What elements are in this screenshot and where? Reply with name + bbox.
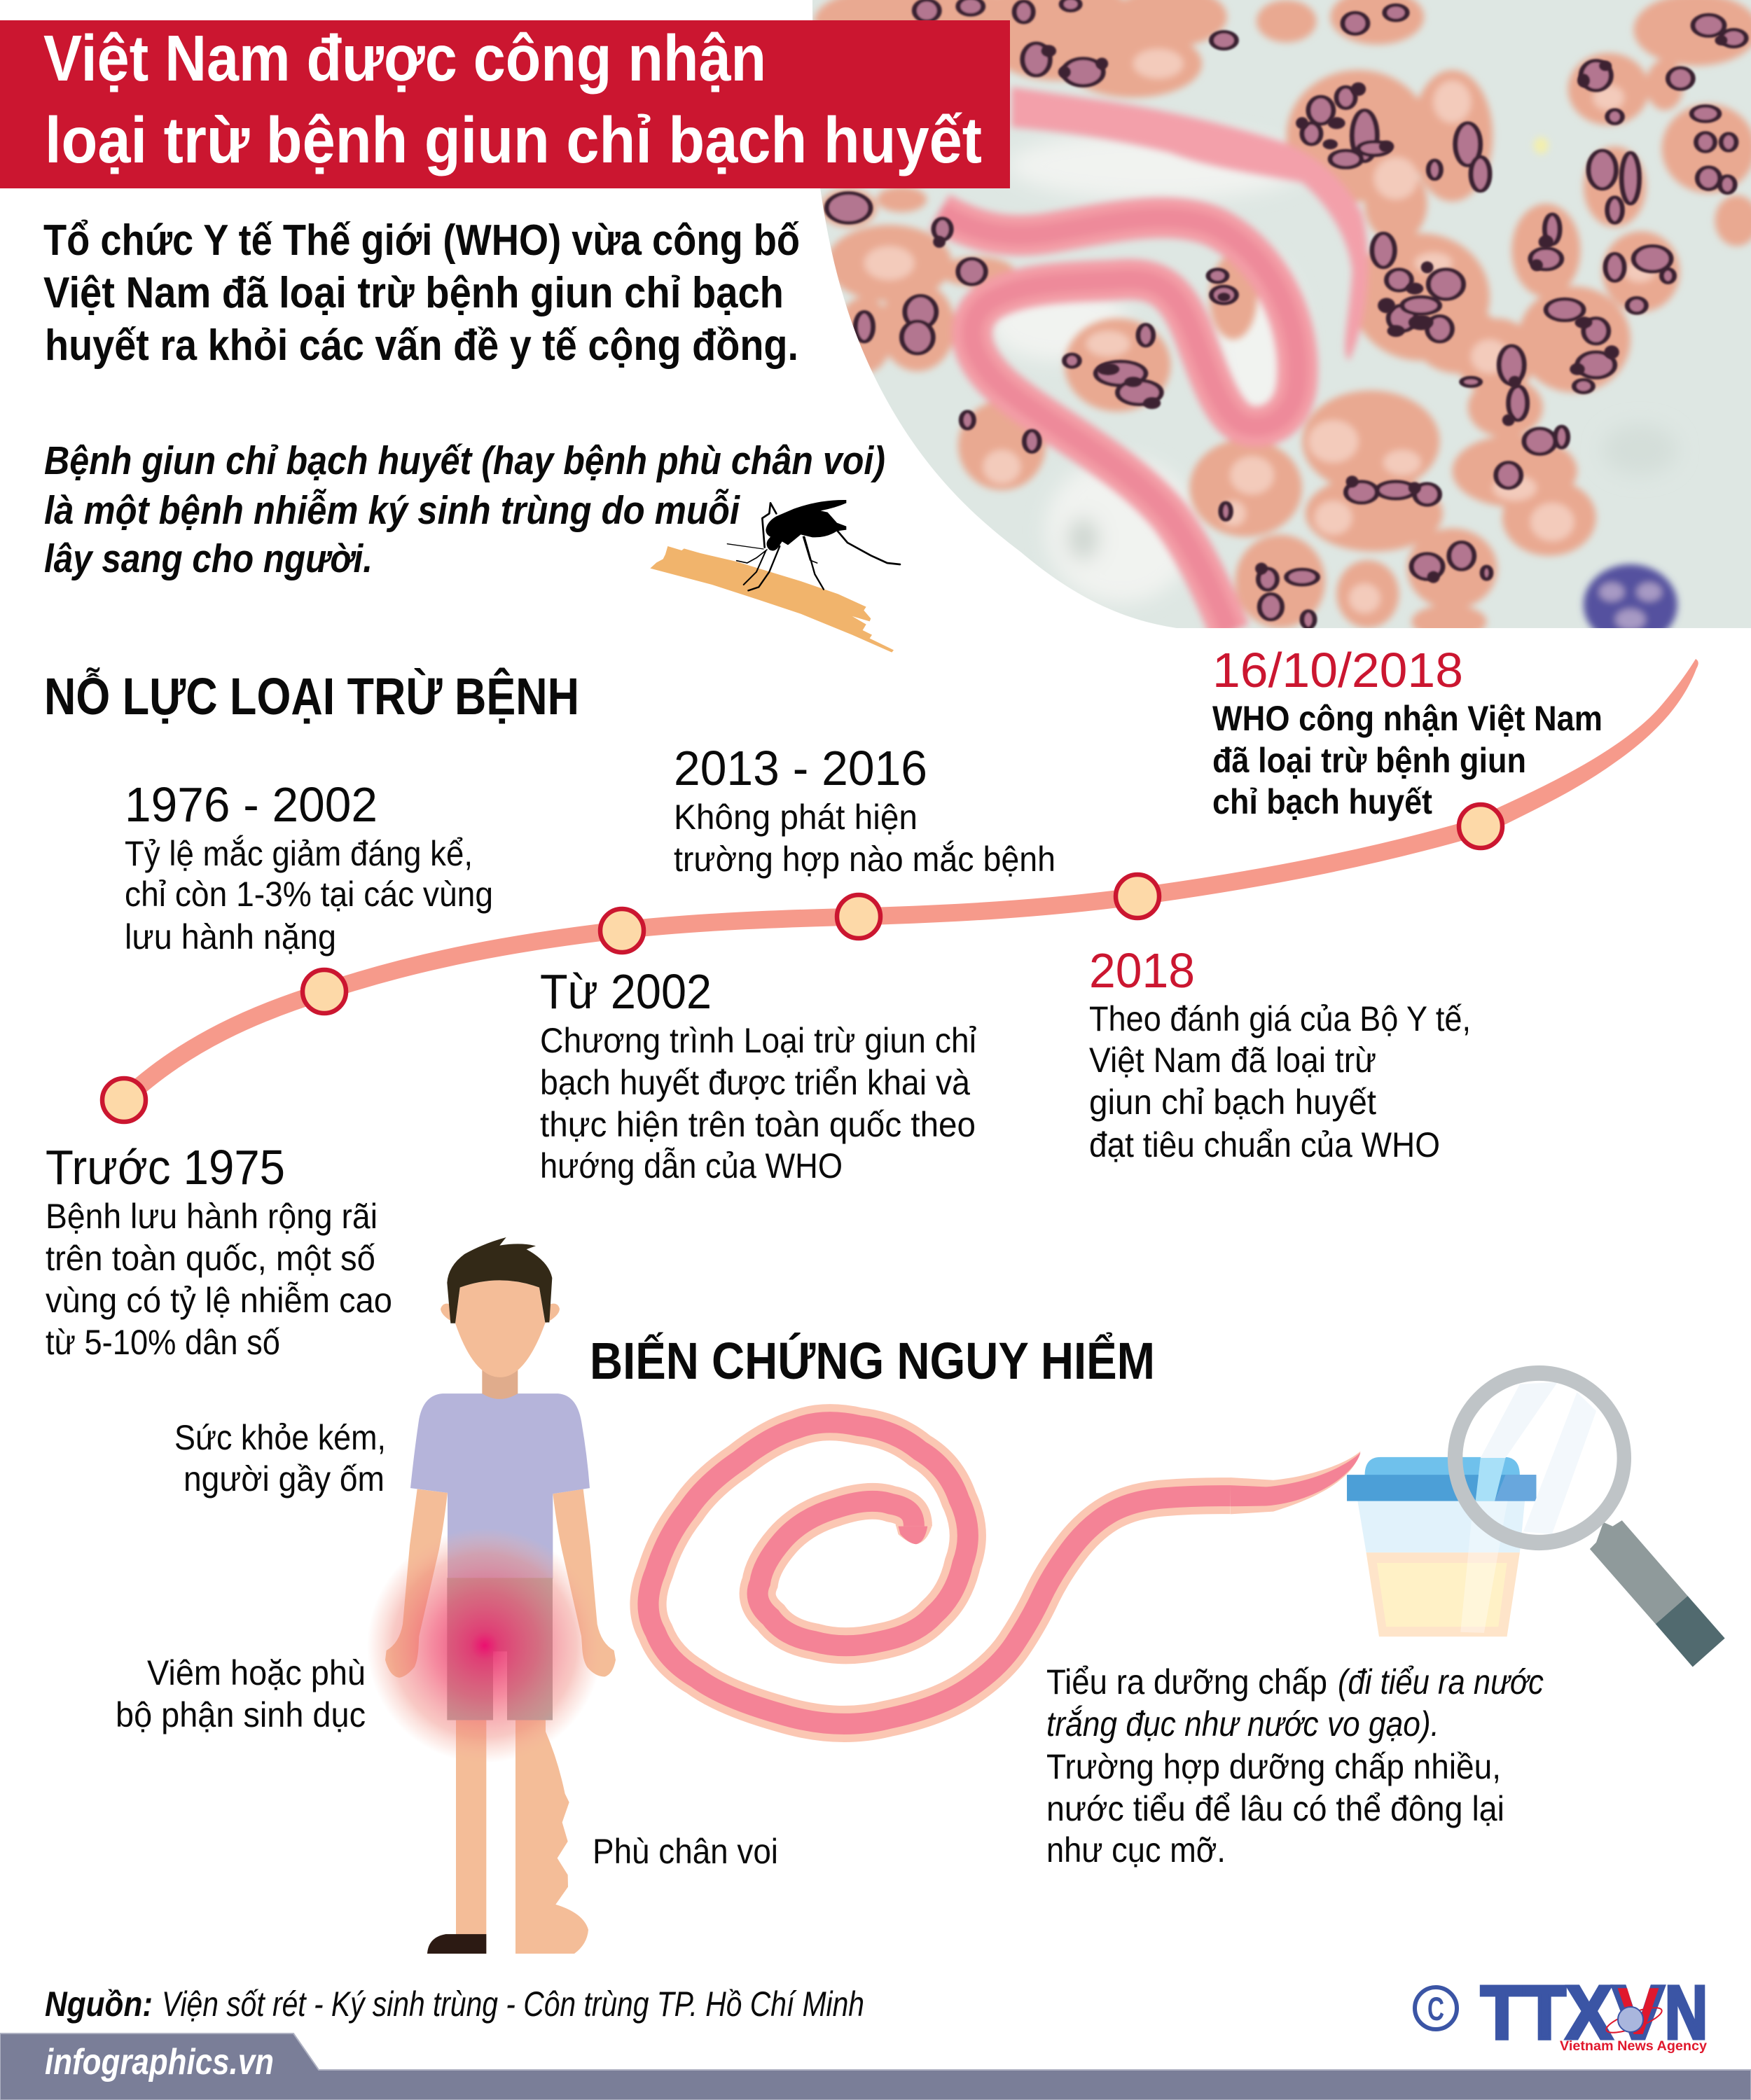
complication description text: (đi tiểu ra nước bbox=[1338, 1662, 1544, 1702]
complication description text: nước tiểu để lâu có thể đông lại bbox=[1046, 1789, 1504, 1828]
logo: copyright mark bbox=[1415, 1987, 1457, 2029]
timeline curve with markers bbox=[102, 659, 1698, 1122]
complication description text bbox=[1046, 1662, 1544, 1870]
complication description text: Tiểu ra dưỡng chấp bbox=[1046, 1662, 1327, 1702]
icon: coiled worm bbox=[649, 1422, 1360, 1724]
logo: TTXVN bbox=[1481, 1970, 1708, 2054]
timeline entry: from 2002: Chương trình Loại trừ giun chỉ bbox=[540, 1021, 976, 1060]
icon: specimen cup under magnifying glass bbox=[1347, 1365, 1725, 1667]
label: genital swelling: bộ phận sinh dục bbox=[116, 1695, 366, 1734]
timeline entry: 1976-2002: lưu hành nặng bbox=[125, 917, 336, 957]
timeline entry: from 2002: thực hiện trên toàn quốc theo bbox=[540, 1105, 976, 1144]
logo: copyright mark: C bbox=[1427, 1990, 1444, 2027]
heading: complications: BIẾN CHỨNG NGUY HIỂM bbox=[590, 1332, 1155, 1390]
timeline entry: from 2002: bạch huyết được triển khai và bbox=[540, 1063, 970, 1102]
timeline entry: from 2002 bbox=[540, 964, 976, 1185]
timeline entry: 1976-2002: 1976 - 2002 bbox=[125, 777, 378, 832]
timeline entry: before 1975: trên toàn quốc, một số bbox=[46, 1239, 375, 1278]
intro text: huyết ra khỏi các vấn đề y tế cộng đồng. bbox=[45, 321, 798, 370]
timeline entry: 1976-2002: chỉ còn 1-3% tại các vùng bbox=[125, 875, 493, 914]
logo: TTXVN: TTX bbox=[1481, 1970, 1612, 2054]
timeline entry: 1976-2002: Tỷ lệ mắc giảm đáng kể, bbox=[125, 834, 473, 873]
timeline entry: 2013-2016: Không phát hiện bbox=[674, 798, 918, 837]
timeline entry: 2018: Theo đánh giá của Bộ Y tế, bbox=[1089, 999, 1471, 1038]
definition text: lây sang cho người. bbox=[44, 536, 373, 581]
complication description text: Trường hợp dưỡng chấp nhiều, bbox=[1046, 1747, 1501, 1786]
timeline entry: from 2002: Từ 2002 bbox=[540, 964, 712, 1019]
heading: efforts: NỖ LỰC LOẠI TRỪ BỆNH bbox=[44, 667, 579, 725]
timeline entry: 2013-2016: trường hợp nào mắc bệnh bbox=[674, 840, 1056, 879]
intro text bbox=[43, 216, 800, 370]
timeline entry: 2018: 2018 bbox=[1089, 943, 1195, 998]
source line: Viện sốt rét - Ký sinh trùng - Côn trùng TP. Hồ Chí Minh bbox=[162, 1984, 864, 2024]
complication description text: trắng đục như nước vo gạo). bbox=[1046, 1704, 1439, 1744]
footer band: infographics.vn bbox=[45, 2042, 274, 2082]
title banner: Việt Nam được công nhận bbox=[43, 22, 766, 95]
timeline entry: before 1975: từ 5-10% dân số bbox=[46, 1323, 280, 1362]
complication description text: như cục mỡ. bbox=[1046, 1830, 1226, 1870]
timeline entry: 2018 bbox=[1089, 943, 1471, 1164]
label: poor health bbox=[174, 1418, 386, 1498]
label: poor health: Sức khỏe kém, bbox=[174, 1418, 386, 1457]
label: poor health: người gầy ốm bbox=[184, 1459, 385, 1498]
label: genital swelling: Viêm hoặc phù bbox=[147, 1653, 366, 1692]
timeline entry: 16/10/2018: WHO công nhận Việt Nam bbox=[1212, 699, 1603, 738]
definition text: là một bệnh nhiễm ký sinh trùng do muỗi bbox=[44, 488, 740, 533]
timeline entry: 2018: Việt Nam đã loại trừ bbox=[1089, 1041, 1376, 1080]
timeline entry: 2018: giun chỉ bạch huyết bbox=[1089, 1083, 1376, 1122]
timeline entry: 16/10/2018: 16/10/2018 bbox=[1212, 643, 1463, 697]
timeline entry: 16/10/2018: chỉ bạch huyết bbox=[1212, 782, 1432, 821]
title banner bbox=[0, 20, 1010, 188]
timeline entry: 2018: đạt tiêu chuẩn của WHO bbox=[1089, 1125, 1440, 1164]
logo: TTXVN: V bbox=[1612, 1970, 1664, 2054]
definition text bbox=[44, 438, 885, 581]
timeline entry: 16/10/2018: đã loại trừ bệnh giun bbox=[1212, 741, 1526, 780]
timeline entry: from 2002: hướng dẫn của WHO bbox=[540, 1146, 843, 1185]
timeline entry: 1976-2002 bbox=[125, 777, 493, 957]
timeline entry: 16/10/2018 bbox=[1212, 643, 1603, 821]
icon: mosquito on skin bbox=[650, 500, 900, 653]
label: elephantiasis: Phù chân voi bbox=[593, 1832, 778, 1871]
footer band bbox=[0, 2033, 1751, 2100]
title banner: loại trừ bệnh giun chỉ bạch huyết bbox=[45, 104, 982, 176]
timeline entry: 2013-2016 bbox=[674, 741, 1056, 879]
definition text: Bệnh giun chỉ bạch huyết (hay bệnh phù chân voi) bbox=[44, 438, 885, 483]
timeline entry: before 1975: Trước 1975 bbox=[46, 1140, 285, 1195]
logo: TTXVN: N bbox=[1665, 1970, 1708, 2054]
logo: TTXVN: V bbox=[1617, 1974, 1659, 2049]
timeline entry: before 1975: Bệnh lưu hành rộng rãi bbox=[46, 1197, 378, 1236]
timeline entry: 2013-2016: 2013 - 2016 bbox=[674, 741, 927, 795]
timeline entry: before 1975: vùng có tỷ lệ nhiễm cao bbox=[46, 1281, 392, 1320]
intro text: Việt Nam đã loại trừ bệnh giun chỉ bạch bbox=[43, 269, 784, 317]
source line: Nguồn: bbox=[45, 1984, 153, 2024]
intro text: Tổ chức Y tế Thế giới (WHO) vừa công bố bbox=[43, 216, 800, 265]
logo: TTXVN: Vietnam News Agency bbox=[1560, 2039, 1707, 2054]
timeline entry: before 1975 bbox=[46, 1140, 392, 1362]
label: genital swelling bbox=[116, 1653, 366, 1734]
photo: microscope image of filarial worm among blood cells bbox=[770, 0, 1751, 645]
icon: human figure with swollen leg bbox=[367, 1237, 616, 1954]
